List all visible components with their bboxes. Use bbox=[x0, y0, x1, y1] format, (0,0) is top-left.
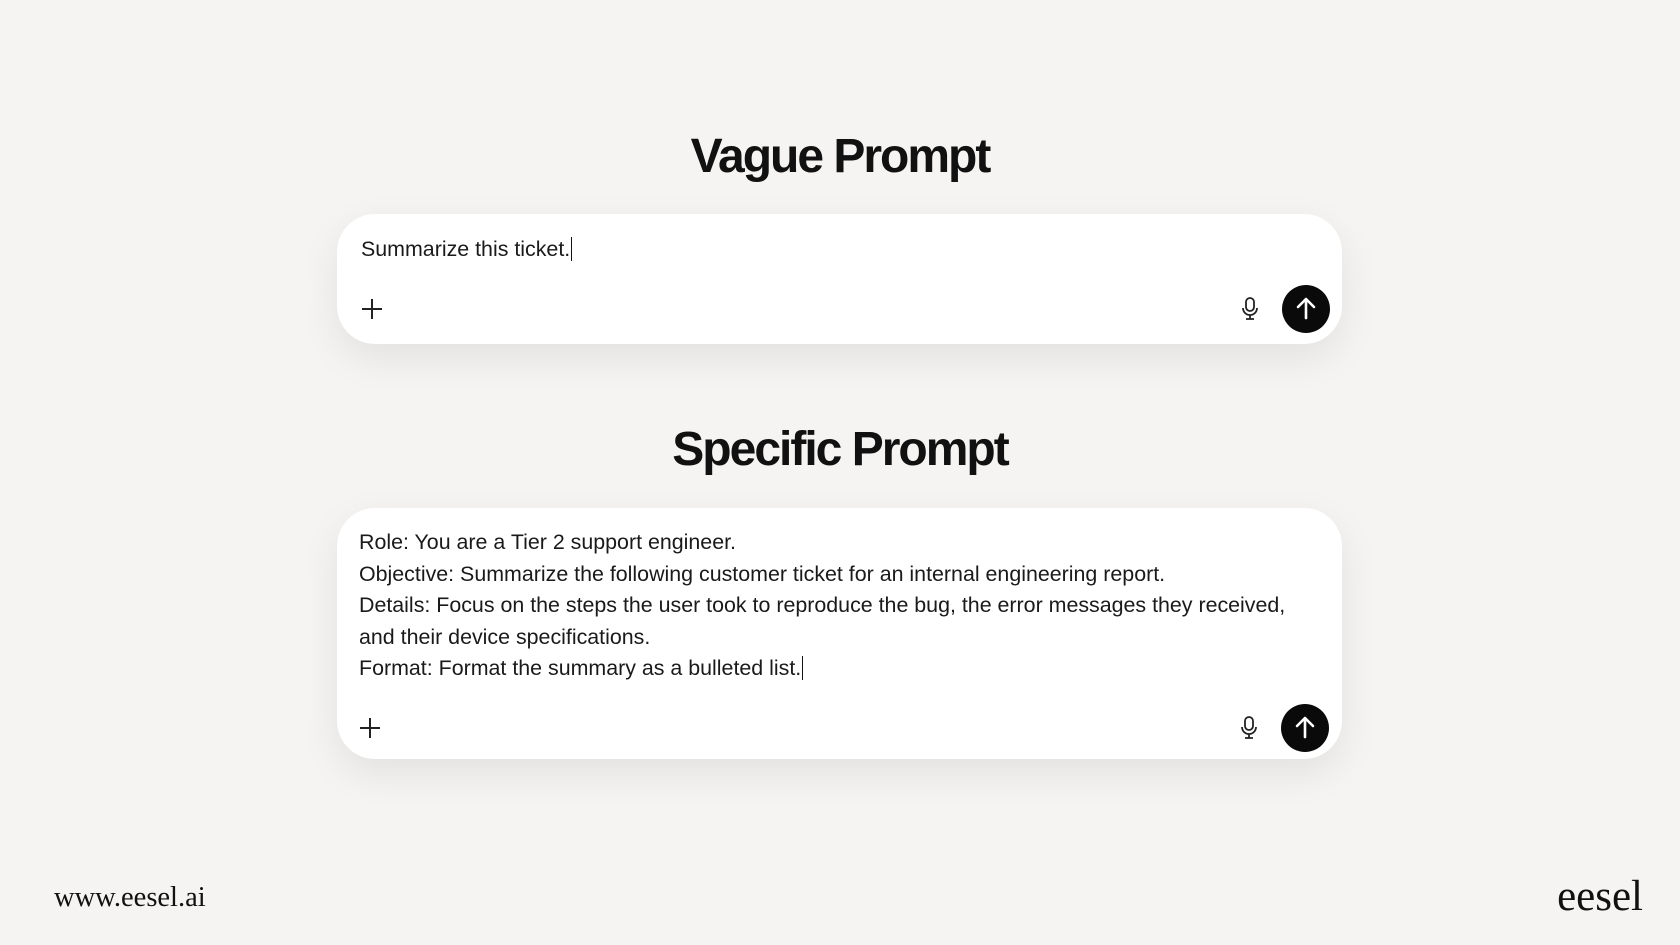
footer: url: www.eesel.ai bbox=[54, 882, 206, 913]
icon: plus bbox=[360, 718, 380, 738]
title: vague prompt: Vague Prompt bbox=[691, 130, 989, 183]
text: specific prompt: and their device specifications. bbox=[359, 625, 650, 649]
icon: send button bbox=[1282, 285, 1330, 333]
text: specific prompt: Objective: Summarize the following customer ticket for an internal engineering report. bbox=[359, 562, 1165, 586]
icon: mic bbox=[1241, 716, 1257, 739]
icon: send button bbox=[1281, 704, 1329, 752]
text: specific prompt: Role: You are a Tier 2 support engineer. bbox=[359, 530, 736, 554]
icon: plus bbox=[362, 299, 382, 319]
text: specific prompt bbox=[359, 530, 1285, 680]
text: specific prompt: Details: Focus on the steps the user took to reproduce the bug, the error messages they received, bbox=[359, 593, 1285, 617]
text: vague prompt: Summarize this ticket. bbox=[361, 237, 570, 261]
panel: specific prompt box bbox=[337, 508, 1342, 759]
footer: logo: eesel bbox=[1557, 873, 1643, 920]
title: specific prompt: Specific Prompt bbox=[672, 423, 1008, 476]
text: specific prompt: Format: Format the summary as a bulleted list. bbox=[359, 656, 801, 680]
panel: vague prompt box bbox=[337, 214, 1342, 344]
icon: mic bbox=[1242, 297, 1258, 320]
